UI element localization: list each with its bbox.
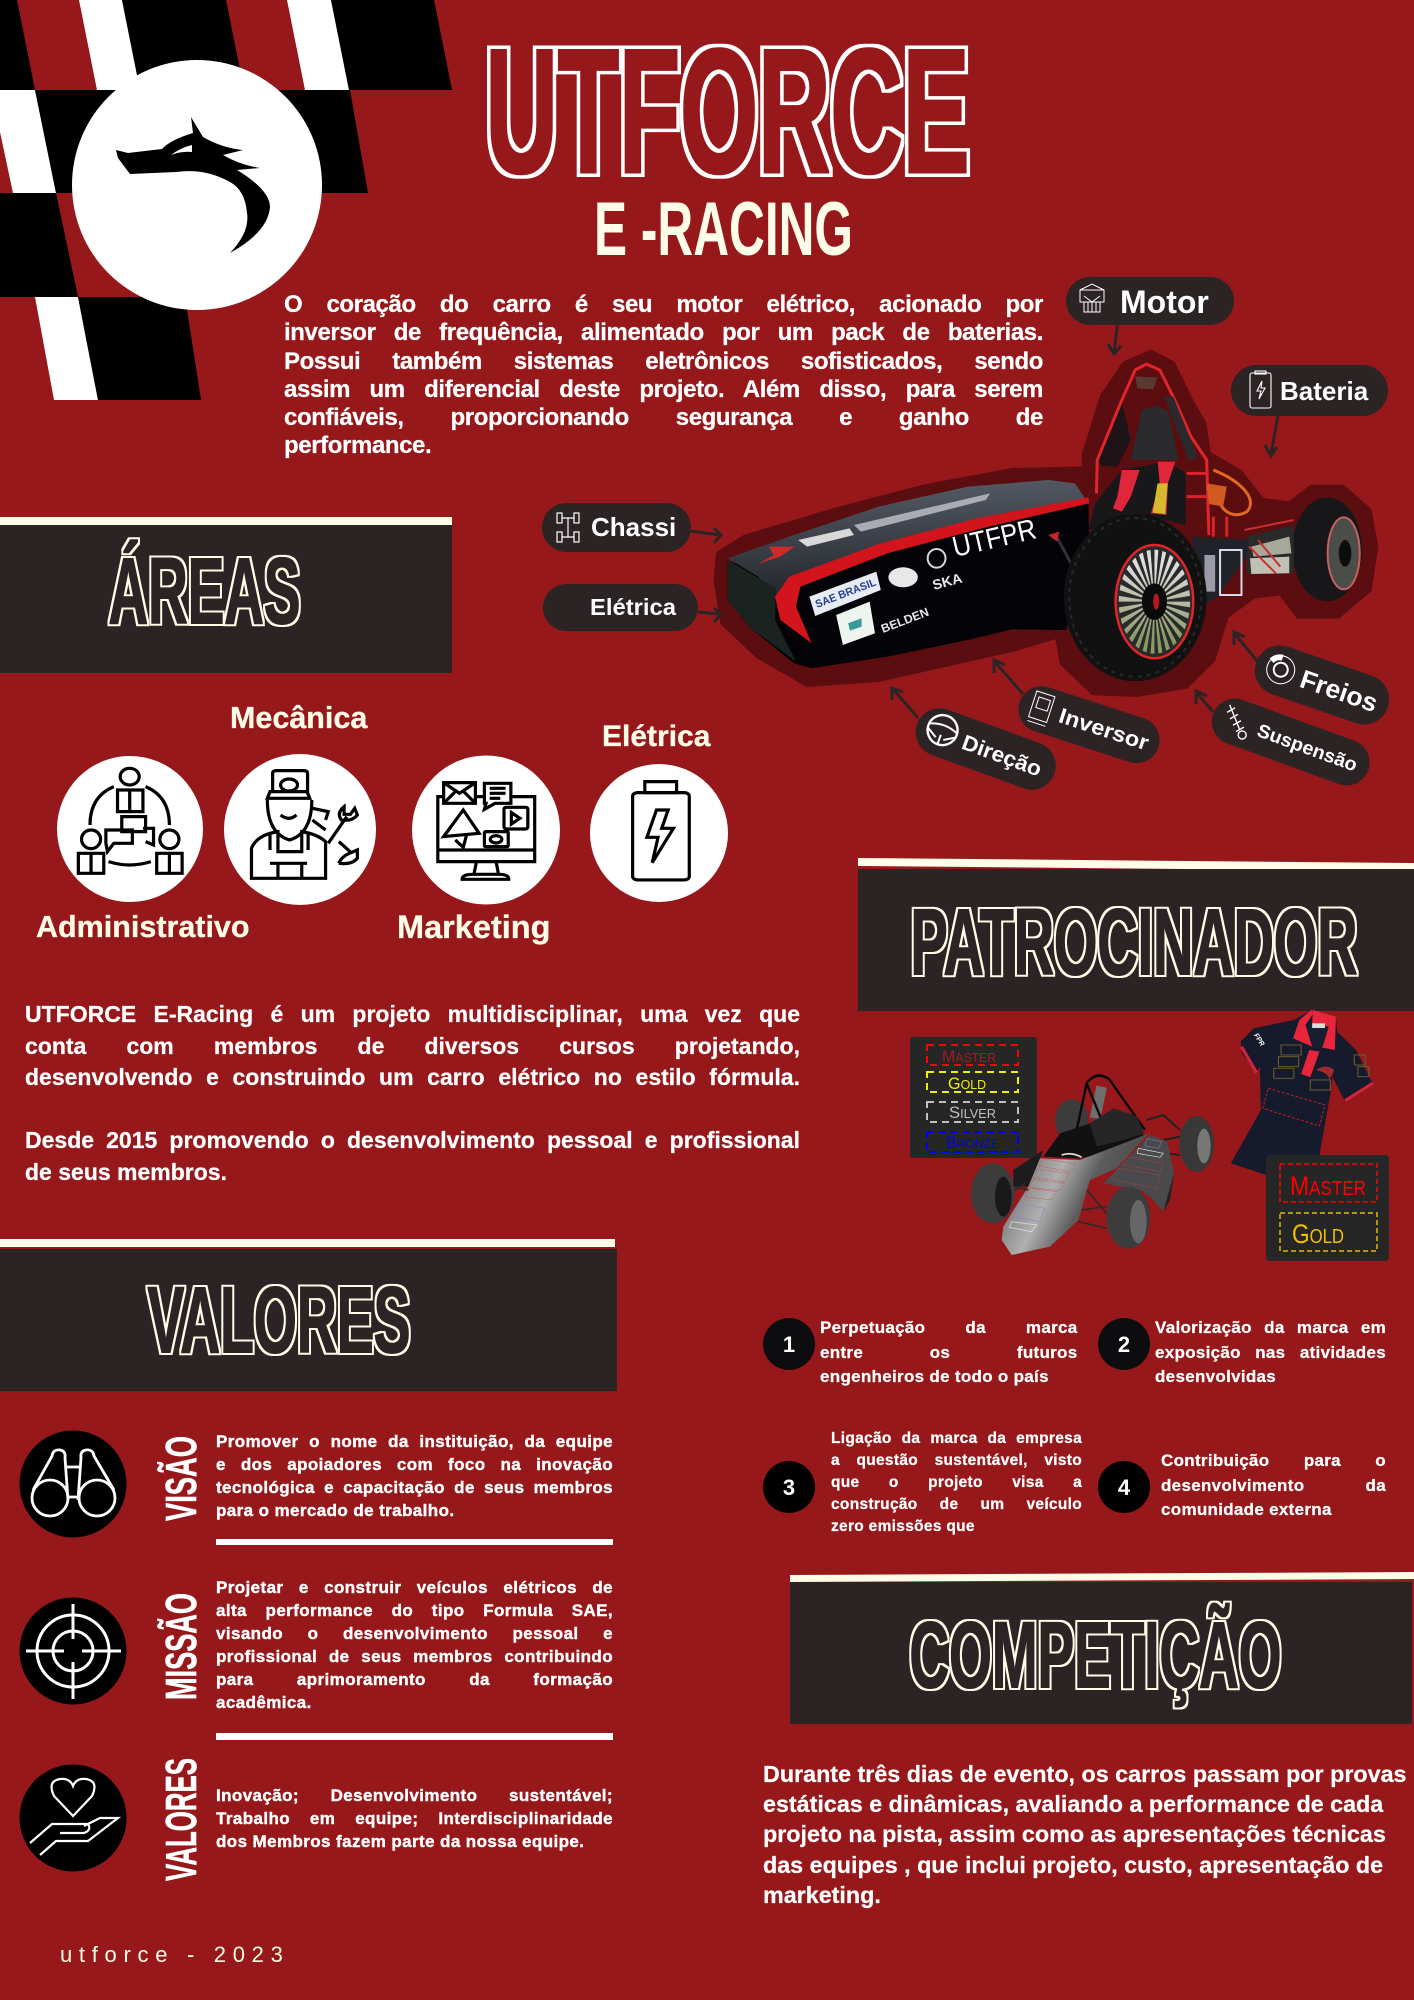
sponsor legend: shirt tiers — [1266, 1155, 1389, 1261]
sponsor legend: car tiers: GOLD — [948, 1074, 986, 1093]
benefit 1: entre os futuros — [820, 1342, 1078, 1362]
about paragraph — [25, 1001, 800, 1184]
banner: ÁREAS: ÁREAS — [108, 538, 300, 644]
text: missão: profissional de seus membros contribuindo — [216, 1647, 613, 1666]
vertical label: VISÃO: VISÃO — [156, 1436, 206, 1521]
about paragraph: desenvolvendo e construindo um carro elétrico no estilo fórmula. — [25, 1064, 800, 1090]
icon: target — [20, 1598, 126, 1704]
label: Direção — [892, 688, 1063, 797]
benefit 2: desenvolvidas — [1155, 1367, 1276, 1386]
label: Chassi — [542, 503, 721, 552]
intro paragraph: inversor de frequência, alimentado por um pack de baterias. — [284, 319, 1043, 346]
icon circle: Marketing — [412, 756, 560, 904]
number badge 4 — [1098, 1461, 1150, 1513]
text: visão — [216, 1432, 613, 1520]
sponsor car render — [971, 1075, 1214, 1255]
benefit 4: Contribuição para o — [1161, 1451, 1386, 1470]
number badge 3 — [763, 1461, 815, 1513]
competition paragraph: marketing. — [763, 1882, 881, 1908]
label: Bateria: Bateria — [1280, 376, 1369, 406]
sponsor legend: car tiers: SILVER — [949, 1103, 996, 1122]
text: valores: Inovação; Desenvolvimento sustentável; — [216, 1786, 613, 1804]
race car photo: BELDEN — [879, 605, 931, 636]
text: missão: alta performance do tipo Formula SAE, — [216, 1601, 613, 1620]
competition paragraph: estáticas e dinâmicas, avaliando a performance de cada — [763, 1791, 1383, 1817]
number badge 4: 4 — [1118, 1475, 1131, 1500]
benefit 1: Perpetuação da marca — [820, 1318, 1078, 1337]
number badge 1: 1 — [783, 1332, 795, 1357]
banner: VALORES — [0, 1239, 617, 1391]
icon: heart in hand — [20, 1764, 126, 1872]
banner: VALORES: VALORES — [148, 1268, 410, 1374]
banner: COMPETIÇÃO — [790, 1572, 1414, 1724]
text: missão: Projetar e construir veículos elétricos de — [216, 1578, 613, 1597]
benefit 4 — [1161, 1451, 1386, 1519]
label: Elétrica — [543, 584, 721, 631]
benefit 1: engenheiros de todo o país — [820, 1367, 1049, 1386]
text: valores: dos Membros fazem parte da nossa equipe. — [216, 1832, 584, 1851]
logo circle with dragon — [72, 60, 322, 310]
intro paragraph: O coração do carro é seu motor elétrico, acionado por — [284, 291, 1043, 318]
sponsor shirt: FPR — [1252, 1033, 1265, 1047]
area label: Mecânica: Mecânica — [230, 701, 367, 735]
benefit 3 — [831, 1430, 1082, 1535]
vertical label: VALORES: VALORES — [157, 1758, 206, 1881]
benefit 1 — [820, 1318, 1078, 1386]
benefit 2: Valorização da marca em — [1155, 1318, 1386, 1337]
divider — [216, 1539, 613, 1545]
about paragraph: de seus membros. — [25, 1158, 227, 1184]
banner: PATROCINADOR — [858, 858, 1414, 1011]
banner: ÁREAS — [0, 517, 452, 673]
race car photo — [716, 352, 1376, 695]
benefit 2 — [1155, 1318, 1386, 1386]
vertical label: MISSÃO: MISSÃO — [156, 1593, 206, 1700]
divider — [216, 1733, 613, 1740]
title UTFORCE: UTFORCE — [486, 12, 970, 210]
text: missão: visando o desenvolvimento pessoal e — [216, 1624, 613, 1643]
sponsor legend: shirt tiers: MASTER — [1290, 1171, 1366, 1201]
label: Bateria — [1231, 365, 1388, 456]
label: Chassi: Chassi — [591, 512, 676, 542]
benefit 3: Ligação da marca da empresa — [831, 1430, 1082, 1447]
icon circle: Administrativo — [57, 756, 203, 902]
number badge 1 — [763, 1318, 815, 1370]
label: Freios: Freios — [1296, 664, 1382, 718]
number badge 3: 3 — [783, 1475, 795, 1500]
sponsor legend: car tiers — [910, 1037, 1037, 1158]
sponsor legend: car tiers: MASTER — [942, 1047, 996, 1066]
benefit 2: exposição nas atividades — [1155, 1342, 1386, 1362]
benefit 3: construção de um veículo — [831, 1496, 1082, 1513]
text: missão — [216, 1578, 613, 1712]
competition paragraph — [763, 1761, 1406, 1908]
text: missão: acadêmica. — [216, 1693, 312, 1712]
sponsor legend: shirt tiers: GOLD — [1292, 1219, 1344, 1249]
label: Suspensão — [1196, 691, 1376, 792]
text: valores: Trabalho em equipe; Interdisciplinaridade — [216, 1809, 613, 1828]
competition paragraph: Durante três dias de evento, os carros passam por provas — [763, 1761, 1406, 1787]
benefit 3: que o projeto visa a — [831, 1474, 1082, 1491]
intro paragraph — [284, 291, 1044, 459]
benefit 3: zero emissões que — [831, 1518, 975, 1535]
text: visão: Promover o nome da instituição, da equipe — [216, 1432, 613, 1451]
race car photo: SKA — [931, 570, 964, 593]
area label: Administrativo: Administrativo — [36, 910, 250, 944]
subtitle E-RACING: E -RACING — [594, 187, 853, 272]
intro paragraph: confiáveis, proporcionando segurança e ganho de — [284, 404, 1043, 431]
number badge 2: 2 — [1118, 1332, 1130, 1357]
benefit 4: desenvolvimento da — [1161, 1476, 1386, 1494]
intro paragraph: Possui também sistemas eletrônicos sofisticados, sendo — [284, 348, 1043, 375]
car sponsor text: UTFPR — [949, 514, 1039, 564]
benefit 4: comunidade externa — [1161, 1500, 1332, 1519]
about paragraph: UTFORCE E-Racing é um projeto multidisciplinar, uma vez que — [25, 1001, 800, 1027]
label: Elétrica: Elétrica — [590, 594, 677, 620]
text: valores — [216, 1786, 613, 1851]
label: Inversor — [994, 660, 1166, 769]
text: missão: para aprimoramento da formação — [216, 1670, 613, 1689]
number badge 2 — [1098, 1318, 1150, 1370]
label: Freios — [1234, 632, 1396, 731]
label: Suspensão: Suspensão — [1254, 721, 1360, 776]
area label: Marketing: Marketing — [397, 909, 551, 945]
text: visão: para o mercado de trabalho. — [216, 1501, 454, 1520]
text: visão: e dos apoiadores com foco na inovação — [216, 1455, 613, 1474]
icon circle: Mecânica — [224, 754, 376, 905]
label: Inversor: Inversor — [1056, 704, 1152, 755]
icon circle: Elétrica — [590, 764, 728, 902]
area label: Elétrica: Elétrica — [602, 720, 710, 753]
label: Direção: Direção — [959, 730, 1045, 781]
intro paragraph: assim um diferencial deste projeto. Além disso, para serem — [284, 376, 1043, 403]
benefit 3: a questão sustentável, visto — [831, 1452, 1082, 1469]
text: visão: tecnológica e capacitação de seus membros — [216, 1478, 613, 1497]
sponsor legend: car tiers: BRONZE — [946, 1133, 999, 1152]
about paragraph: Desde 2015 promovendo o desenvolvimento pessoal e profissional — [25, 1127, 800, 1153]
sponsor shirt — [1231, 1009, 1373, 1175]
footer: utforce - 2023 — [60, 1942, 290, 1967]
about paragraph: conta com membros de diversos cursos projetando, — [25, 1032, 800, 1058]
competition paragraph: das equipes , que inclui projeto, custo, apresentação de — [763, 1852, 1383, 1878]
checkered flag — [0, 0, 452, 400]
intro paragraph: performance. — [284, 432, 431, 459]
race car photo: SAE BRASIL — [814, 577, 878, 611]
competition paragraph: projeto na pista, assim como as apresentações técnicas — [763, 1821, 1386, 1847]
icon: binoculars — [20, 1430, 126, 1538]
label: Motor: Motor — [1120, 284, 1209, 320]
label: Motor — [1066, 277, 1234, 354]
